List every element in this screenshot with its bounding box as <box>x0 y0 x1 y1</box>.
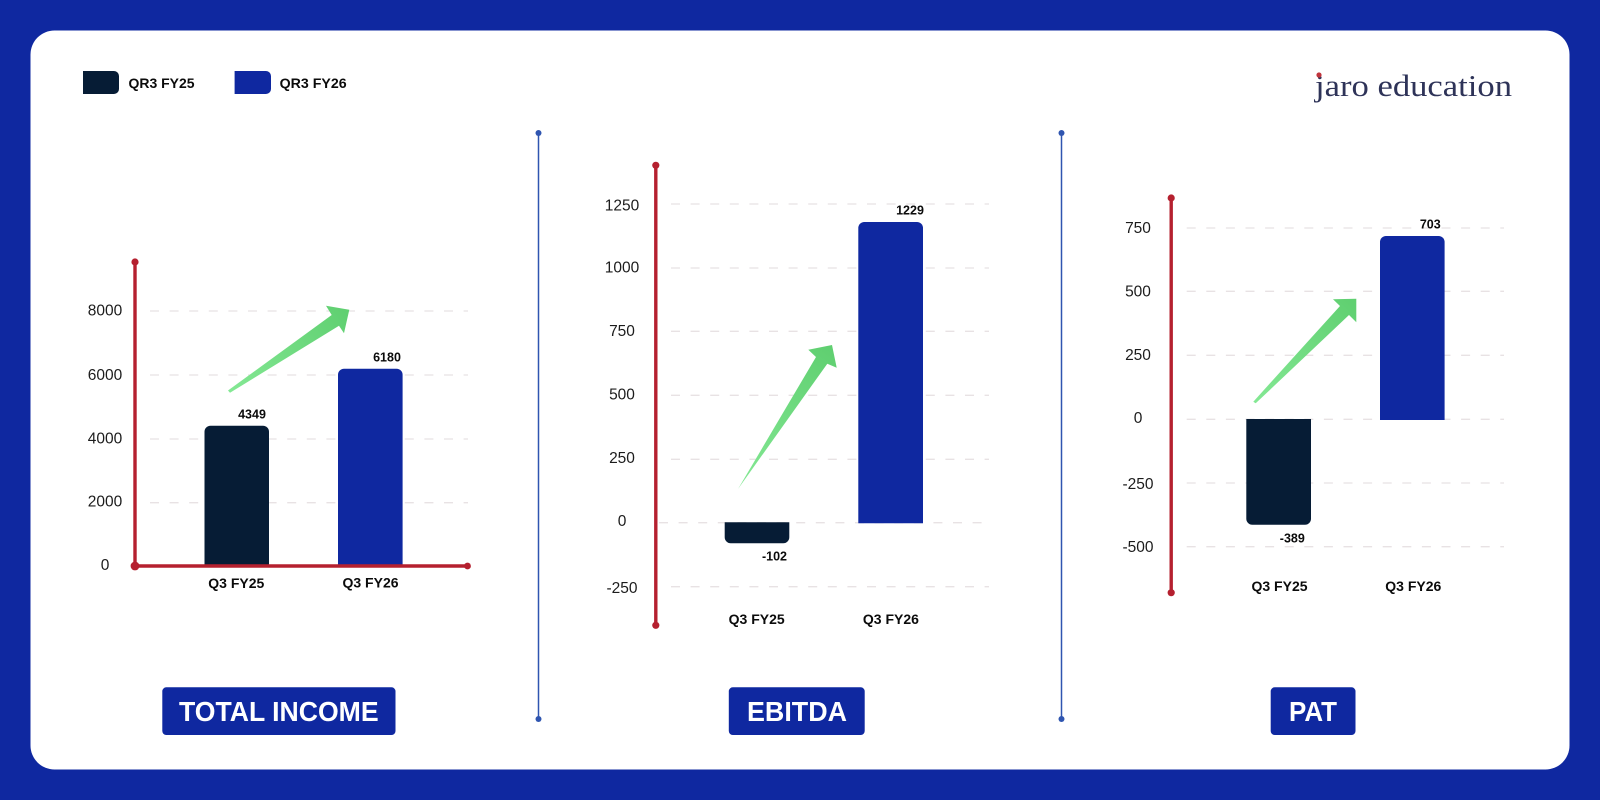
bar: Q3 FY25 -389 <box>1246 419 1311 525</box>
heading: total income <box>162 687 396 735</box>
y axis labels: 0 <box>1134 410 1143 427</box>
panel: pat <box>1122 194 1504 735</box>
y axis labels: 750 <box>609 323 635 340</box>
bar: Q3 FY25 -102 <box>725 522 789 543</box>
gridlines <box>150 311 468 503</box>
category label Q3 FY25: Q3 FY25 <box>729 611 785 627</box>
y axis labels: -250 <box>1122 476 1154 493</box>
y axis labels <box>1122 220 1154 556</box>
legend label: QR3 FY25: QR3 FY25 <box>128 75 195 91</box>
y axis labels: 1250 <box>605 198 640 214</box>
y axis labels: 250 <box>1125 347 1151 364</box>
divider left <box>536 130 542 722</box>
bar: Q3 FY26 703 <box>1380 236 1445 420</box>
value label -389: -389 <box>1280 532 1305 546</box>
y axis labels: 6000 <box>88 367 123 384</box>
y axis labels: -500 <box>1122 539 1154 556</box>
category label Q3 FY26: Q3 FY26 <box>1385 578 1442 594</box>
y axis labels: 8000 <box>88 302 123 320</box>
category label Q3 FY26: Q3 FY26 <box>342 574 399 590</box>
heading: pat <box>1271 687 1356 735</box>
y axis labels: 1000 <box>605 260 640 276</box>
legend <box>83 71 347 94</box>
growth arrow <box>1253 299 1356 403</box>
bar: Q3 FY26 1229 <box>858 222 923 523</box>
y axis labels: -250 <box>606 580 638 597</box>
axes <box>131 258 471 570</box>
value label -102: -102 <box>762 550 787 564</box>
bar: Q3 FY25 4349 <box>204 426 269 566</box>
logo: jaro education: jaro education <box>1314 68 1513 103</box>
growth arrow <box>738 345 837 489</box>
legend swatch: QR3 FY26 <box>235 71 271 94</box>
value label 703: 703 <box>1420 218 1441 232</box>
heading: total income: TOTAL INCOME <box>179 696 379 727</box>
heading: ebitda: EBITDA <box>747 696 847 727</box>
y axis labels: 250 <box>609 450 635 467</box>
y axis labels: 500 <box>1125 284 1151 300</box>
category label Q3 FY25: Q3 FY25 <box>208 575 265 591</box>
panel: ebitda <box>605 162 989 735</box>
y axis labels <box>605 198 640 597</box>
heading: pat: PAT <box>1289 696 1337 727</box>
gridlines <box>1187 228 1504 547</box>
panel: total income <box>88 258 471 735</box>
y axis labels: 0 <box>618 513 627 530</box>
gridlines <box>659 204 989 587</box>
y axis labels: 750 <box>1125 220 1151 237</box>
legend label: QR3 FY26: QR3 FY26 <box>280 75 347 91</box>
y axis labels: 500 <box>609 386 635 404</box>
y axis labels <box>88 302 123 574</box>
y axis labels: 2000 <box>88 494 123 510</box>
divider right <box>1058 130 1064 722</box>
y axis labels: 0 <box>101 557 110 574</box>
heading: ebitda <box>729 687 865 735</box>
value label 6180: 6180 <box>373 350 401 364</box>
y axis <box>652 162 659 629</box>
value label 1229: 1229 <box>896 204 924 218</box>
category label Q3 FY25: Q3 FY25 <box>1251 578 1308 594</box>
growth arrow <box>228 306 349 393</box>
value label 4349: 4349 <box>238 408 266 422</box>
legend swatch: QR3 FY25 <box>83 71 119 94</box>
bar: Q3 FY26 6180 <box>338 369 403 566</box>
y axis <box>1168 194 1175 596</box>
y axis labels: 4000 <box>88 430 123 448</box>
category label Q3 FY26: Q3 FY26 <box>863 611 919 627</box>
